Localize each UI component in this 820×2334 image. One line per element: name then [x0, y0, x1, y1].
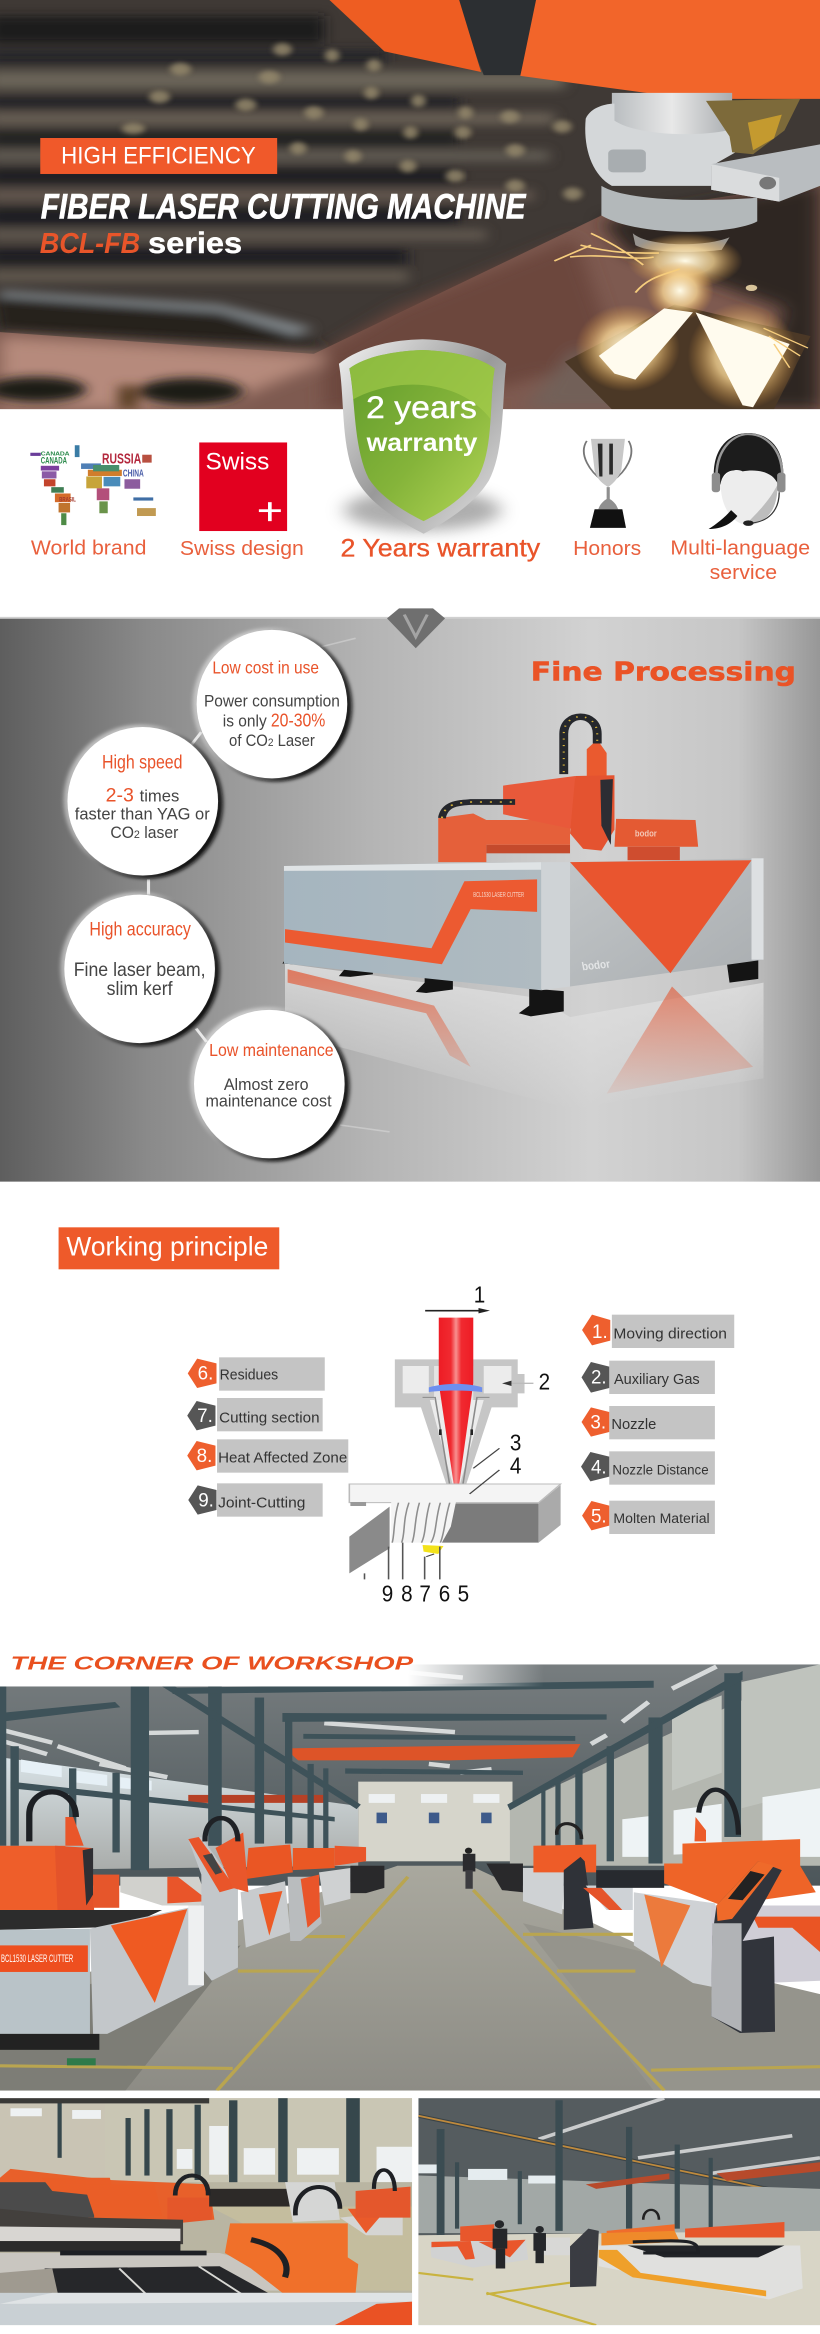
floor — [0, 2182, 412, 2293]
far wall — [358, 1782, 513, 1861]
legend item 3: Nozzle — [611, 1417, 656, 1433]
legend item 5: 5. — [591, 1506, 607, 1527]
legend item 2 — [582, 1361, 715, 1394]
ceiling — [0, 1664, 820, 1886]
laser beam — [439, 1318, 473, 1503]
callout numbers 9 to 5: 9 — [382, 1582, 393, 1607]
near bed front — [0, 2293, 412, 2325]
bubble: high speed: 2-3 — [106, 784, 134, 805]
label — [670, 536, 810, 584]
near gantry — [60, 2223, 358, 2293]
legend item 9: 9. — [198, 1490, 214, 1511]
white strip below hero — [0, 409, 820, 603]
columns — [437, 2100, 713, 2238]
bed right face — [570, 858, 764, 986]
gantry — [438, 717, 698, 862]
warranty shield badge — [339, 339, 506, 534]
icon: world map of words: CANADA — [41, 452, 70, 457]
legend item 4: Nozzle Distance — [612, 1461, 709, 1477]
photo: workshop bottom left — [0, 2098, 412, 2325]
panel: working principle — [59, 1227, 734, 1607]
cutting head diagram — [349, 1283, 561, 1607]
feature: honors — [573, 439, 641, 560]
icon: world map of words — [30, 445, 156, 525]
photo: main workshop aisle — [0, 1664, 820, 2091]
callout numbers 9 to 5: 7 — [419, 1582, 431, 1607]
legend item 6: Residues — [220, 1368, 278, 1383]
tag: high efficiency: HIGH EFFICIENCY — [61, 142, 256, 169]
legend item 6 — [188, 1357, 325, 1391]
badge text: warranty — [366, 430, 477, 457]
bubble: high speed: times — [140, 787, 179, 805]
left small machine — [430, 2220, 546, 2268]
faint connector tails — [322, 638, 390, 1132]
callout numbers 3 and 4: 3 — [510, 1431, 521, 1456]
legend item 7: 7. — [197, 1405, 213, 1427]
legend item 1: Moving direction — [613, 1326, 727, 1342]
feature label: 2 years warranty: 2 Years warranty — [340, 535, 540, 563]
hero photo: sparks and molten light — [554, 233, 811, 409]
floor — [418, 2231, 820, 2325]
person — [463, 1848, 475, 1889]
gas arrow and label — [502, 1370, 550, 1395]
bubble: low maintenance — [190, 1008, 349, 1161]
left machine near: BCL1530 LASER CUTTER — [1, 1953, 73, 1965]
orange triangle — [570, 860, 751, 973]
panel: fine processing — [0, 608, 820, 1182]
legend item 7: Cutting section — [219, 1410, 320, 1426]
left machine mid — [120, 1818, 248, 1981]
connectors between bubbles — [149, 732, 207, 1042]
bubble: high speed: High speed — [102, 751, 183, 773]
legend item 8 — [187, 1439, 348, 1473]
ceiling stripes — [539, 2098, 820, 2173]
workers — [493, 2220, 546, 2268]
cable chain — [564, 717, 597, 774]
legend item 7 — [187, 1398, 323, 1431]
bubble: low cost in use: is only — [223, 712, 267, 730]
skylights — [5, 1667, 716, 1777]
plate surface — [0, 182, 820, 409]
orange stripe with model name: BCL1530 LASER CUTTER — [473, 890, 524, 899]
icon: headset operator — [709, 433, 785, 529]
fiber laser machine illustration: bodor — [581, 958, 611, 973]
legend item 4 — [581, 1451, 715, 1485]
feature: world brand — [30, 445, 156, 559]
photo: workshop bottom right — [418, 2098, 820, 2325]
icon: trophy — [584, 439, 631, 528]
far machine group — [544, 2210, 784, 2255]
heading: working principle: Working principle — [66, 1232, 268, 1262]
legend item 8: 8. — [197, 1445, 212, 1467]
machine legs — [282, 946, 758, 1016]
icon: world map of words: CHINA — [123, 467, 144, 479]
bubble: high accuracy: slim kerf — [107, 977, 173, 999]
hero banner — [0, 0, 820, 603]
bubble: low cost in use: Power consumption — [204, 692, 340, 711]
legend item 5 — [582, 1501, 715, 1534]
callout numbers 9 to 5: 6 — [439, 1582, 450, 1607]
legend item 2: 2. — [591, 1367, 607, 1388]
moving direction arrow: 1 — [474, 1283, 485, 1308]
gantry: bodor — [635, 829, 657, 839]
bubble: high accuracy: High accuracy — [89, 918, 191, 940]
icon: world map of words: BRASIL — [59, 495, 76, 503]
panel: the corner of workshop — [0, 1640, 820, 2325]
bubble: low maintenance: Low maintenance — [209, 1041, 334, 1060]
feature: multi-language service — [670, 433, 810, 584]
label: Swiss design — [180, 537, 304, 560]
bubble: high speed — [64, 725, 223, 879]
near machine — [599, 2231, 803, 2299]
legend item 6: 6. — [198, 1363, 213, 1384]
legend item 3: 3. — [590, 1412, 606, 1433]
bubble: low cost in use: Low cost in use — [212, 658, 319, 678]
workpiece — [349, 1484, 561, 1573]
legend item 9 — [188, 1483, 323, 1517]
icon: world map of words: CANADA — [41, 456, 67, 466]
legend item 1: 1. — [592, 1321, 608, 1343]
bed corner post — [541, 862, 570, 990]
legend item 4: 4. — [591, 1457, 607, 1478]
bubble: high speed: CO2 laser — [110, 824, 179, 842]
legend item 1 — [582, 1315, 734, 1348]
icon: swiss plus box: Swiss — [206, 448, 269, 474]
left machine row far — [241, 1844, 384, 1948]
floor — [90, 1866, 654, 2090]
right wall — [510, 1700, 820, 1866]
heading: the corner of workshop: THE CORNER OF WORKSHOP — [10, 1654, 414, 1674]
far machines — [0, 2169, 298, 2224]
columns — [58, 2098, 360, 2187]
callout numbers 9 to 5 — [365, 1543, 469, 1607]
subtitle: series: series — [148, 227, 242, 260]
reflection of machine — [285, 964, 764, 1109]
left wall — [0, 1757, 358, 1870]
orange stripe with model name — [285, 879, 537, 964]
bubble: low cost in use: of CO2 Laser — [229, 732, 315, 750]
legend item 3 — [582, 1406, 715, 1439]
back wall — [418, 2176, 820, 2233]
legend item 2: Auxiliary Gas — [614, 1372, 700, 1388]
right machines far — [486, 1824, 664, 1930]
legend item 9: Joint-Cutting — [218, 1496, 305, 1511]
corrugated walls — [209, 2098, 412, 2099]
subtitle: series — [40, 227, 242, 260]
bubble: low maintenance: maintenance cost — [206, 1092, 332, 1111]
bubble: low cost in use: 20-30% — [271, 710, 325, 730]
gas arrow and label: 2 — [539, 1370, 550, 1395]
hero photo: orange cutting head housing — [329, 0, 820, 99]
steel columns and girders — [0, 1671, 743, 1870]
title: fiber laser cutting machine: FIBER LASER CUTTING MACHINE — [41, 186, 526, 226]
legend item 5: Molten Material — [613, 1510, 710, 1526]
bubble: low cost in use — [193, 628, 352, 781]
bubble: high speed: faster than YAG or — [75, 805, 210, 823]
icon: diamond marker — [387, 608, 445, 648]
heading: working principle — [59, 1227, 279, 1269]
subtitle: series: BCL-FB — [40, 228, 140, 260]
bubble: high accuracy — [61, 892, 220, 1046]
blurred hole highlights — [122, 43, 582, 200]
crane — [285, 1744, 580, 1760]
fiber laser machine illustration — [282, 717, 764, 1016]
focusing lens — [429, 1384, 482, 1392]
left wall windows — [21, 1760, 152, 1790]
badge text: 2 years — [366, 389, 477, 425]
gas flow markers — [440, 1429, 472, 1435]
bed left face — [284, 862, 541, 990]
legend item 8: Heat Affected Zone — [218, 1450, 347, 1466]
hero photo: perforated sheet background — [0, 0, 820, 409]
moving direction arrow — [425, 1283, 490, 1313]
tag: high efficiency — [40, 138, 277, 174]
near machine beds — [0, 2209, 279, 2293]
label: service — [710, 561, 777, 584]
label: Honors — [573, 537, 641, 560]
badge text — [366, 389, 477, 457]
nozzle housing — [395, 1359, 525, 1487]
hero photo: silver laser head — [585, 93, 820, 252]
callout numbers 9 to 5: 8 — [401, 1582, 413, 1607]
console — [570, 2229, 599, 2287]
right wall windows — [622, 1788, 820, 1857]
label: World brand — [31, 536, 146, 559]
title band — [0, 1640, 544, 1686]
bubble: high accuracy: Fine laser beam, — [74, 958, 206, 980]
callout numbers 9 to 5: 5 — [458, 1582, 469, 1607]
yellow floor lines — [0, 1877, 820, 2091]
right mid machine — [285, 2170, 411, 2235]
callout numbers 3 and 4 — [470, 1431, 521, 1494]
feature: swiss design — [180, 442, 304, 560]
callout numbers 3 and 4: 4 — [510, 1454, 521, 1479]
bubble: low maintenance: Almost zero — [224, 1076, 309, 1094]
right machine near — [634, 1790, 820, 2033]
icon: world map of words: RUSSIA — [102, 450, 141, 467]
left machine near — [0, 1792, 204, 2065]
